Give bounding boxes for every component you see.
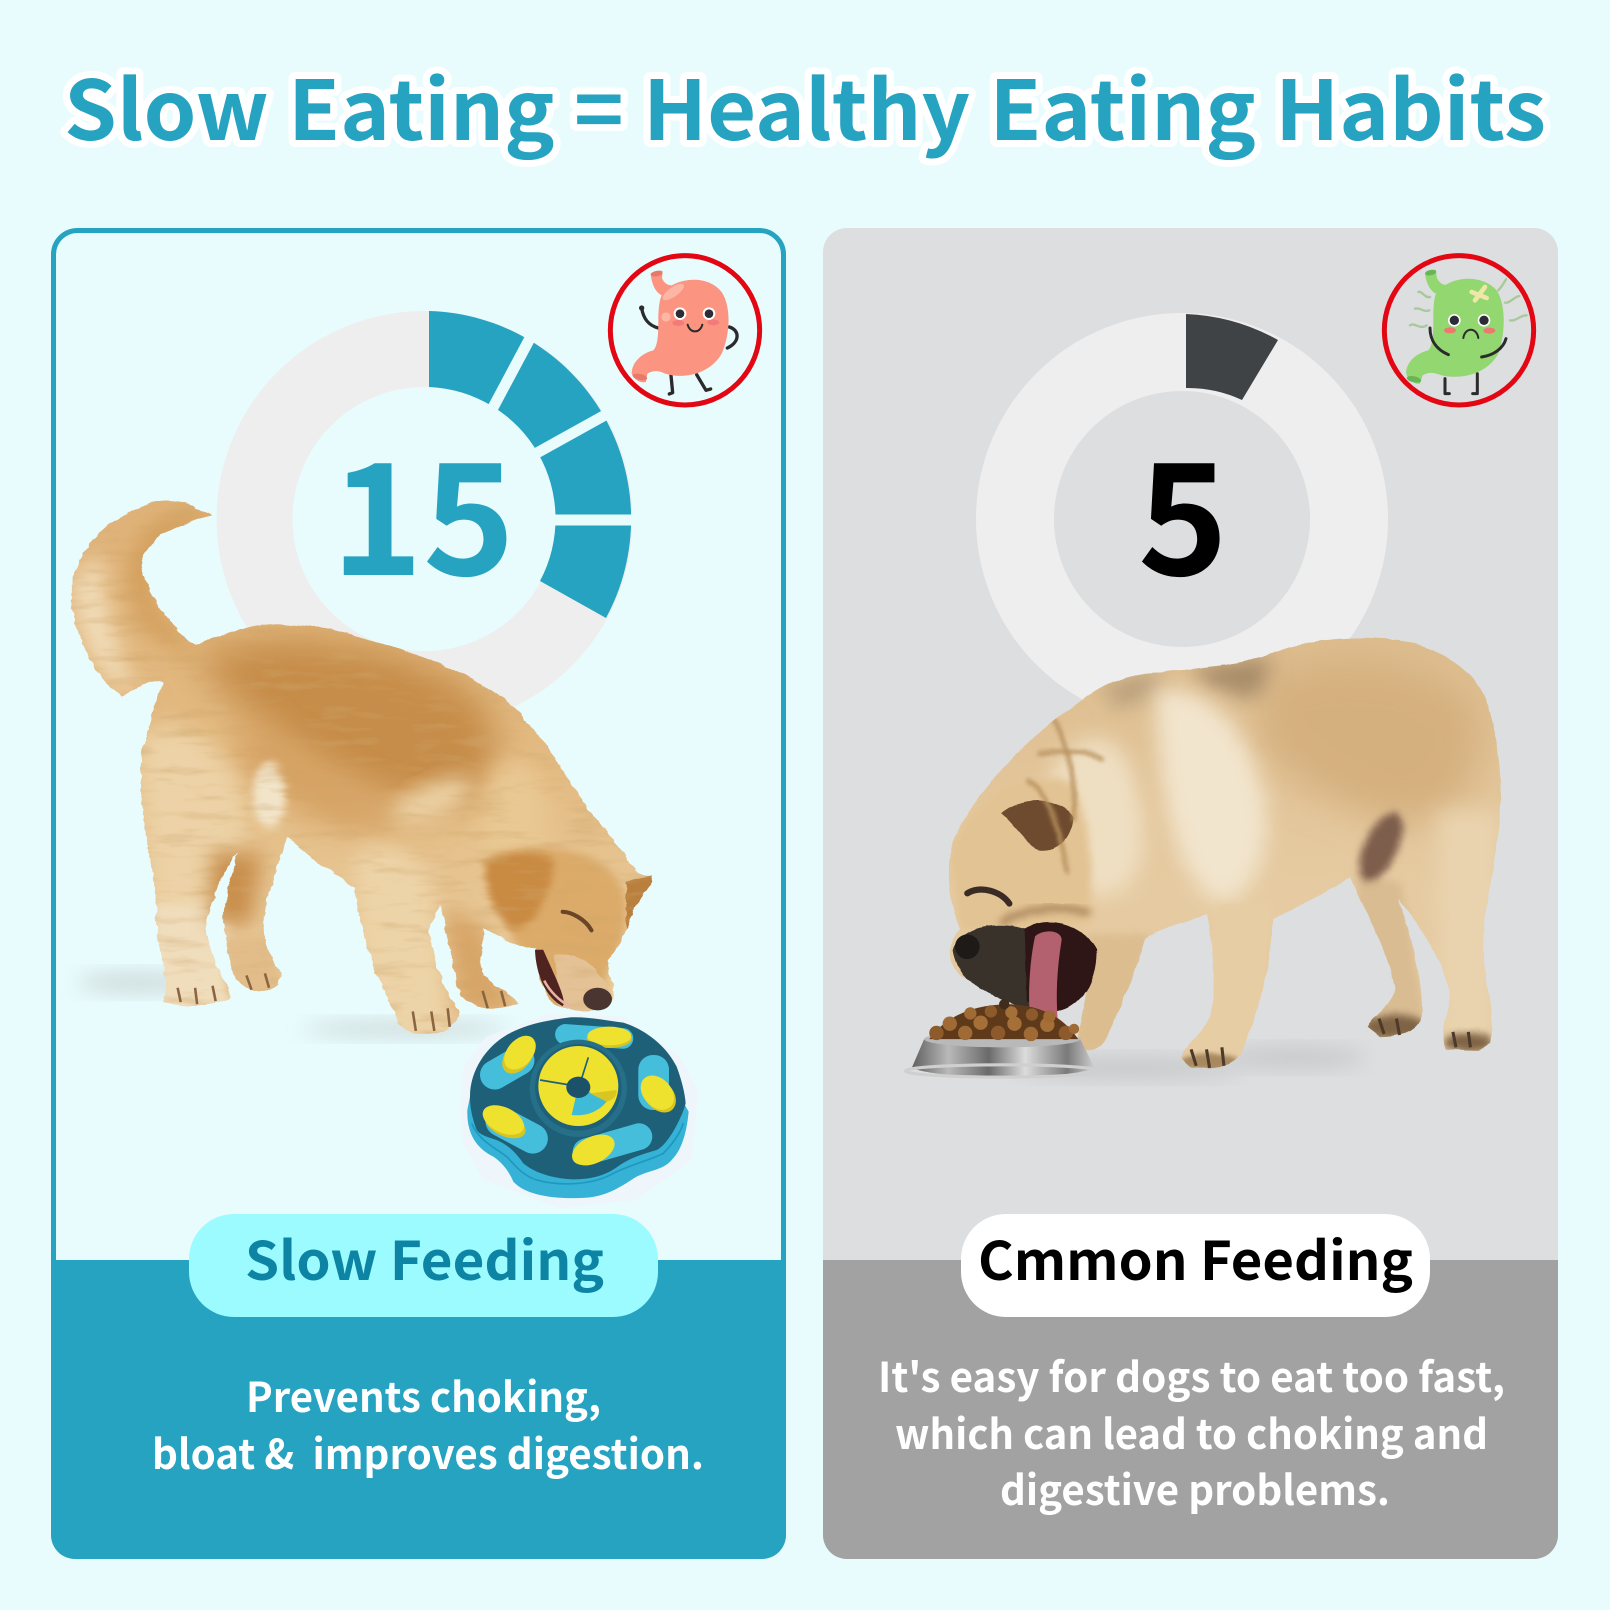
label pill: slow feeding: Slow Feeding bbox=[245, 1220, 604, 1296]
label pill: common feeding: Cmmon Feeding bbox=[978, 1220, 1413, 1296]
toy slots bbox=[475, 1023, 669, 1168]
number 5: 5 bbox=[1138, 395, 1228, 620]
bottom band bbox=[51, 1260, 786, 1559]
bottom band bbox=[823, 1260, 1558, 1559]
ground shadow bbox=[77, 972, 508, 1037]
text: common feeding problems: It's easy for dogs to eat too fast, bbox=[878, 1344, 1505, 1404]
toy yellow buttons bbox=[478, 1027, 683, 1172]
head bbox=[493, 848, 626, 1017]
label pill: common feeding bbox=[823, 1214, 1558, 1559]
toy halo bbox=[460, 1013, 698, 1208]
donut chart: 15 bbox=[254, 311, 640, 689]
donut chart: 5 bbox=[1015, 314, 1349, 686]
shoulder highlight bbox=[385, 768, 477, 834]
flank and legs bbox=[133, 725, 246, 924]
muzzle and mouth bbox=[952, 925, 1030, 1007]
icon: happy stomach bbox=[610, 256, 760, 405]
number 15: 15 bbox=[331, 395, 515, 620]
text: slow feeding benefits bbox=[152, 1364, 704, 1481]
card background bbox=[823, 228, 1558, 1559]
food bowl bbox=[906, 999, 1099, 1077]
toy centre dial bbox=[530, 1040, 627, 1137]
shoulder highlight bbox=[1155, 689, 1267, 904]
text: common feeding problems: digestive problems. bbox=[1000, 1457, 1390, 1517]
dog: pug eating from bowl bbox=[906, 616, 1520, 1078]
icon: sick stomach bbox=[1384, 256, 1534, 405]
panel: slow feeding bbox=[51, 230, 786, 1559]
kibble bbox=[929, 999, 1079, 1041]
tail shading bbox=[128, 511, 216, 657]
ground shadow bbox=[1017, 1047, 1366, 1078]
dog: golden retriever bbox=[70, 500, 652, 1044]
panel: common feeding bbox=[823, 228, 1558, 1559]
text: slow feeding benefits: bloat & improves digestion. bbox=[152, 1421, 704, 1481]
slow feeder toy bbox=[460, 1013, 698, 1208]
tongue and brow bbox=[955, 890, 1470, 1068]
groin shadow bbox=[1354, 808, 1408, 886]
card background bbox=[54, 230, 784, 1556]
head bbox=[950, 779, 1091, 929]
saddle bbox=[195, 639, 497, 805]
hindquarter shading bbox=[1258, 660, 1481, 821]
face and paw details bbox=[178, 912, 612, 1031]
label pill: slow feeding bbox=[51, 1214, 786, 1559]
text: common feeding problems: which can lead to choking and bbox=[895, 1401, 1488, 1461]
text: common feeding problems bbox=[878, 1344, 1505, 1517]
text: slow feeding benefits: Prevents choking, bbox=[246, 1364, 601, 1424]
title: Slow Eating = Healthy Eating Habits bbox=[64, 45, 1546, 164]
